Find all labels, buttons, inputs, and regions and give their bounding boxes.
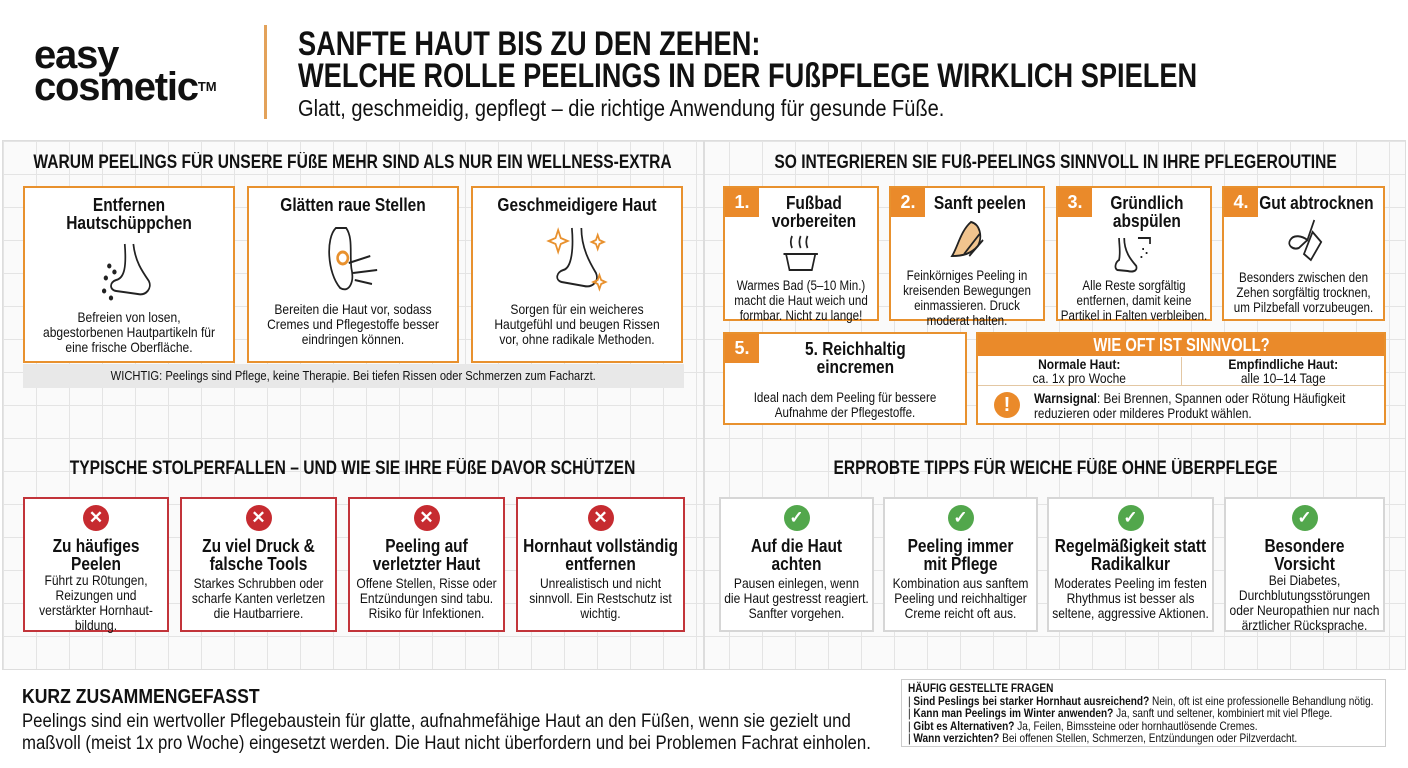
step 5: 5. bbox=[734, 338, 750, 358]
card: Glätten: Cremes und Pflegestoffe besser bbox=[267, 316, 439, 332]
card: Geschmeidiger: Geschmeidigere Haut bbox=[497, 195, 657, 215]
card: Hautschüppchen: Befreien von losen, bbox=[77, 309, 181, 325]
pitfall 1: Peelen bbox=[71, 554, 121, 574]
tip 4: Durchblutungsstörungen bbox=[1239, 587, 1370, 603]
note bar bbox=[23, 364, 684, 388]
tip 3: ✓ bbox=[1123, 508, 1138, 527]
tip 2: mit Pflege bbox=[924, 554, 997, 574]
icon: scrub hand bbox=[950, 220, 984, 257]
step 2: kreisenden Bewegungen bbox=[903, 283, 1031, 298]
note bar: WICHTIG: Peelings sind Pflege, keine Therapie. Bei tiefen Rissen oder Schmerzen zum Facharzt. bbox=[111, 368, 596, 383]
step 1: macht die Haut weich und bbox=[734, 293, 868, 308]
tip 3 bbox=[1047, 497, 1214, 632]
main grid frame bbox=[2, 140, 1406, 670]
pitfall 2 bbox=[180, 497, 337, 632]
step 4 bbox=[1222, 186, 1385, 321]
icon: foot water bbox=[1114, 237, 1151, 272]
step 5: 5. Reichhaltig bbox=[805, 339, 906, 359]
step 4: um Pilzbefall vorzubeugen. bbox=[1234, 300, 1373, 315]
card: Hautschüppchen: eine frische Oberfläche. bbox=[65, 339, 193, 355]
FAQ box: | Sind Peslings bei starker Hornhaut ausreichend? Nein, oft ist eine professionelle Behandlung nötig. bbox=[908, 694, 1373, 708]
tip 3: Regelmäßigkeit statt bbox=[1055, 536, 1206, 556]
pitfall 4: entfernen bbox=[565, 554, 636, 574]
pitfall 3: Entzündungen sind tabu. bbox=[360, 590, 493, 606]
pitfall 4 bbox=[516, 497, 685, 632]
frequency header bbox=[978, 334, 1384, 356]
tip 1: Pausen einlegen, wenn bbox=[734, 575, 859, 591]
pitfall 1: verstärkter Hornhaut- bbox=[39, 602, 153, 618]
step 3: Gründlich bbox=[1110, 193, 1183, 213]
frequency box: Normale Haut: bbox=[1038, 356, 1120, 372]
tip 4: Besondere bbox=[1264, 536, 1345, 556]
tip 2: ✓ bbox=[953, 508, 968, 527]
icon: bowl bbox=[783, 236, 818, 271]
card: Hautschüppchen: Hautschüppchen bbox=[66, 213, 192, 233]
step 4: Besonders zwischen den bbox=[1239, 270, 1368, 285]
logo bbox=[34, 33, 217, 109]
pitfall 2: Starkes Schrubben oder bbox=[194, 575, 323, 591]
FAQ box: | Wann verzichten? Bei offenen Stellen, Schmerzen, Entzündungen oder Pilzverdacht. bbox=[908, 731, 1297, 745]
step 4: Gut abtrocknen bbox=[1259, 193, 1374, 213]
step 1: 1. bbox=[734, 192, 750, 212]
pitfall 1: ✕ bbox=[89, 508, 103, 527]
icon: hand on foot bbox=[328, 227, 378, 290]
tip 2 bbox=[883, 497, 1038, 632]
step 2: Feinkörniges Peeling in bbox=[907, 268, 1027, 283]
summary: KURZ ZUSAMMENGEFASST bbox=[22, 686, 260, 708]
pitfall 3: verletzter Haut bbox=[373, 554, 480, 574]
step 1: vorbereiten bbox=[772, 211, 856, 231]
heading: SO INTEGRIEREN SIE FUß-PEELINGS SINNVOLL IN IHRE PFLEGEROUTINE bbox=[774, 152, 1337, 173]
pitfall 3: Risiko für Infektionen. bbox=[369, 605, 484, 621]
icon: foot sparkles bbox=[546, 227, 608, 292]
step 2: Sanft peelen bbox=[934, 193, 1026, 213]
summary bbox=[22, 686, 871, 754]
frequency box: alle 10–14 Tage bbox=[1240, 370, 1325, 386]
tip 4 bbox=[1224, 497, 1385, 632]
step 2 bbox=[889, 186, 1045, 321]
step 5: Aufnahme der Pflegestoffe. bbox=[775, 405, 915, 420]
tip 2: Peeling und reichhaltiger bbox=[894, 590, 1027, 606]
warning: Warnsignal: Bei Brennen, Spannen oder Rötung Häufigkeit bbox=[1034, 390, 1345, 406]
step 4: 4. bbox=[1233, 192, 1248, 212]
step 3: 3. bbox=[1067, 192, 1082, 212]
panel: why peelings bbox=[23, 152, 684, 388]
pitfall 3: ✕ bbox=[419, 508, 434, 527]
card: Glätten: Bereiten die Haut vor, sodass bbox=[274, 301, 432, 317]
tip 1: ✓ bbox=[789, 508, 804, 527]
FAQ box bbox=[901, 679, 1386, 747]
step 3: entfernen, damit keine bbox=[1077, 293, 1191, 308]
tip 4: Vorsicht bbox=[1274, 554, 1335, 574]
pitfall 1 bbox=[23, 497, 169, 632]
tip 1 bbox=[719, 497, 874, 632]
heading: TYPISCHE STOLPERFALLEN – UND WIE SIE IHRE FÜßE DAVOR SCHÜTZEN bbox=[70, 458, 635, 479]
logo: cosmeticTM bbox=[34, 65, 217, 109]
tip 2: Creme reicht oft aus. bbox=[905, 605, 1016, 621]
card: Glätten: Glätten raue Stellen bbox=[280, 195, 426, 215]
pitfall 2: falsche Tools bbox=[210, 554, 307, 574]
step 1: formbar. Nicht zu lange! bbox=[740, 308, 862, 323]
card: Geschmeidiger bbox=[471, 186, 683, 363]
pitfall 3 bbox=[348, 497, 505, 632]
tip 4: ✓ bbox=[1297, 508, 1312, 527]
tip 1: Sanfter vorgehen. bbox=[749, 605, 844, 621]
tip 1: die Haut gestresst reagiert. bbox=[724, 590, 869, 606]
step 3: Partikel in Falten verbleiben. bbox=[1061, 308, 1207, 323]
pitfall 1: Führt zu R0tungen, bbox=[44, 572, 148, 588]
FAQ box: | Gibt es Alternativen? Ja, Feilen, Bimssteine oder hornhautlösende Cremes. bbox=[908, 718, 1258, 732]
card: Geschmeidiger: vor, ohne radikale Methoden. bbox=[499, 331, 655, 347]
step 1 bbox=[723, 186, 879, 321]
title bbox=[298, 25, 1197, 95]
card: Glätten: eindringen können. bbox=[302, 331, 404, 347]
step 5: Ideal nach dem Peeling für bessere bbox=[754, 390, 936, 405]
step 5: eincremen bbox=[817, 357, 894, 377]
step 3 bbox=[1056, 186, 1212, 321]
tip 2: Kombination aus sanftem bbox=[893, 575, 1028, 591]
frequency box: ca. 1x pro Woche bbox=[1033, 370, 1126, 386]
card: Hautschüppchen: abgestorbenen Hautpartikeln für bbox=[43, 324, 215, 340]
card: Glätten bbox=[247, 186, 459, 363]
pitfall 3: Peeling auf bbox=[385, 536, 468, 556]
tip 3: seltene, aggressive Aktionen. bbox=[1052, 605, 1209, 621]
summary: Peelings sind ein wertvoller Pflegebaustein für glatte, aufnahmefähige Haut an den Füßen, wenn sie gezielt und bbox=[22, 710, 851, 732]
pitfall 2: Zu viel Druck & bbox=[202, 536, 315, 556]
pitfall 2: scharfe Kanten verletzen bbox=[192, 590, 325, 606]
tip 3: Radikalkur bbox=[1091, 554, 1170, 574]
FAQ box: | Kann man Peelings im Winter anwenden? Ja, sanft und seltener, kombiniert mit viel Pflege. bbox=[908, 706, 1332, 720]
FAQ box: HÄUFIG GESTELLTE FRAGEN bbox=[908, 681, 1053, 695]
tip 2: Peeling immer bbox=[908, 536, 1013, 556]
tip 4: Bei Diabetes, bbox=[1269, 572, 1340, 588]
icon: towel foot bbox=[1288, 220, 1322, 262]
pitfall 2: ✕ bbox=[251, 508, 266, 527]
tip 4: ärztlicher Rücksprache. bbox=[1242, 617, 1367, 633]
pitfall 1: Reizungen und bbox=[56, 587, 137, 603]
step 2: moderat halten. bbox=[927, 313, 1007, 328]
step 3: abspülen bbox=[1113, 211, 1181, 231]
pitfall 1: Zu häufiges bbox=[53, 536, 139, 556]
warning: reduzieren oder milderes Produkt wählen. bbox=[1034, 405, 1252, 421]
panel: tips bbox=[719, 458, 1385, 633]
panel: routine bbox=[723, 152, 1386, 425]
pitfall 3: Offene Stellen, Risse oder bbox=[356, 575, 497, 591]
frequency box: Empfindliche Haut: bbox=[1228, 356, 1338, 372]
card: Hautschüppchen: Entfernen bbox=[93, 195, 165, 215]
card: Geschmeidiger: Hautgefühl und beugen Rissen bbox=[494, 316, 660, 332]
step 1: Fußbad bbox=[786, 193, 842, 213]
warning: ! bbox=[1004, 394, 1010, 416]
step 1: Warmes Bad (5–10 Min.) bbox=[737, 278, 865, 293]
title: WELCHE ROLLE PEELINGS IN DER FUßPFLEGE WIRKLICH SPIELEN bbox=[298, 57, 1197, 95]
icon: foot flakes bbox=[102, 244, 151, 300]
warning bbox=[994, 390, 1346, 421]
tip 4: oder Neuropathien nur nach bbox=[1230, 602, 1379, 618]
summary: maßvoll (meist 1x pro Woche) eingesetzt werden. Die Haut nicht überfordern und bei Problemen Fachrat einholen. bbox=[22, 732, 871, 754]
logo: easy bbox=[34, 33, 118, 77]
tip 1: achten bbox=[772, 554, 821, 574]
pitfall 4: Hornhaut vollständig bbox=[523, 536, 678, 556]
pitfall 4: wichtig. bbox=[580, 605, 621, 621]
tip 3: Rhythmus ist besser als bbox=[1067, 590, 1194, 606]
card: Hautschüppchen bbox=[23, 186, 235, 363]
pitfall 4: Unrealistisch und nicht bbox=[540, 575, 661, 591]
pitfall 4: ✕ bbox=[593, 508, 608, 527]
pitfall 4: sinnvoll. Ein Restschutz ist bbox=[529, 590, 672, 606]
step 2: 2. bbox=[900, 192, 916, 212]
frequency header: WIE OFT IST SINNVOLL? bbox=[1093, 335, 1269, 355]
step 5 bbox=[723, 332, 967, 425]
pitfall 2: die Hautbarriere. bbox=[214, 605, 303, 621]
panel: pitfalls bbox=[23, 458, 685, 633]
tip 1: Auf die Haut bbox=[751, 536, 842, 556]
card: Geschmeidiger: Sorgen für ein weicheres bbox=[510, 301, 644, 317]
subtitle: Glatt, geschmeidig, gepflegt – die richtige Anwendung für gesunde Füße. bbox=[298, 95, 944, 121]
pitfall 1: bildung. bbox=[75, 617, 117, 633]
title: SANFTE HAUT BIS ZU DEN ZEHEN: bbox=[298, 25, 760, 63]
tip 3: Moderates Peeling im festen bbox=[1054, 575, 1207, 591]
header divider bbox=[264, 25, 267, 119]
heading: WARUM PEELINGS FÜR UNSERE FÜßE MEHR SIND ALS NUR EIN WELLNESS-EXTRA bbox=[33, 152, 672, 173]
heading: ERPROBTE TIPPS FÜR WEICHE FÜßE OHNE ÜBERPFLEGE bbox=[834, 458, 1278, 479]
step 3: Alle Reste sorgfältig bbox=[1082, 278, 1186, 293]
step 2: einmassieren. Druck bbox=[914, 298, 1020, 313]
frequency box bbox=[976, 332, 1386, 425]
step 4: Zehen sorgfältig trocknen, bbox=[1236, 285, 1371, 300]
